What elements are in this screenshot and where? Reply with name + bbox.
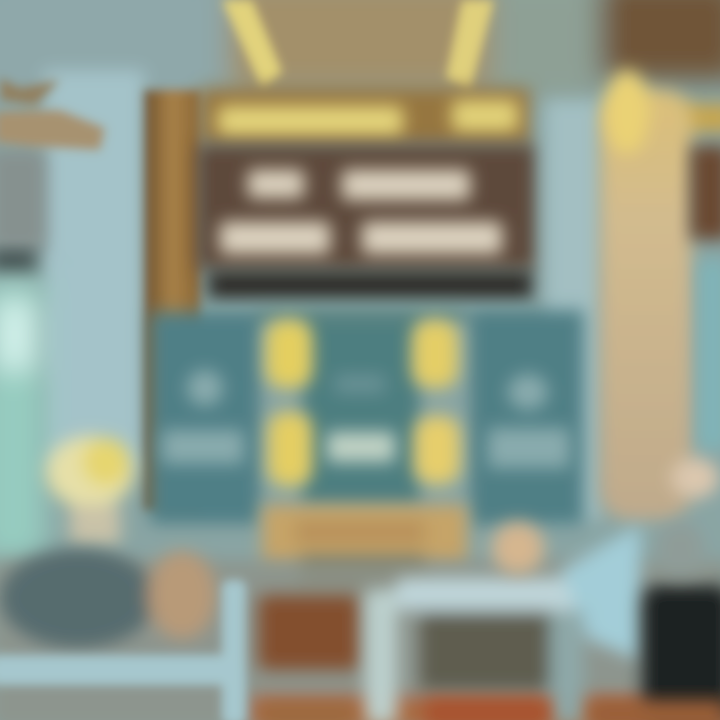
wood wall panel [144,90,200,510]
left sofa cushion [0,548,216,648]
ceiling beam [200,88,530,144]
left dark band [0,250,36,274]
left sofa frame [0,580,246,720]
left window [0,280,46,560]
yellow lights [266,320,460,486]
centre brown table [258,595,360,670]
right wood panel [690,145,720,240]
wood shelf [262,505,467,587]
floor wood strips [262,698,720,720]
column light glow [605,70,649,154]
blurred panel text [162,370,570,468]
teal panels [150,308,584,525]
ceiling light frame [222,0,494,90]
sign board [196,144,536,270]
blurred sign lettering [220,170,502,254]
ceiling [0,0,720,100]
left wall stripe [0,150,46,250]
lamp [46,436,134,545]
sign shadow band [208,272,533,298]
right window [698,260,720,450]
left pale pillar [44,70,144,470]
ceiling light strips [218,100,720,136]
right beige column [600,90,692,520]
decorative branch left [0,78,105,150]
dark right armchair [642,458,720,720]
cushion on right chair [492,522,544,574]
floor area [0,560,720,720]
right pale pillar [545,100,600,520]
right chair [365,525,640,720]
